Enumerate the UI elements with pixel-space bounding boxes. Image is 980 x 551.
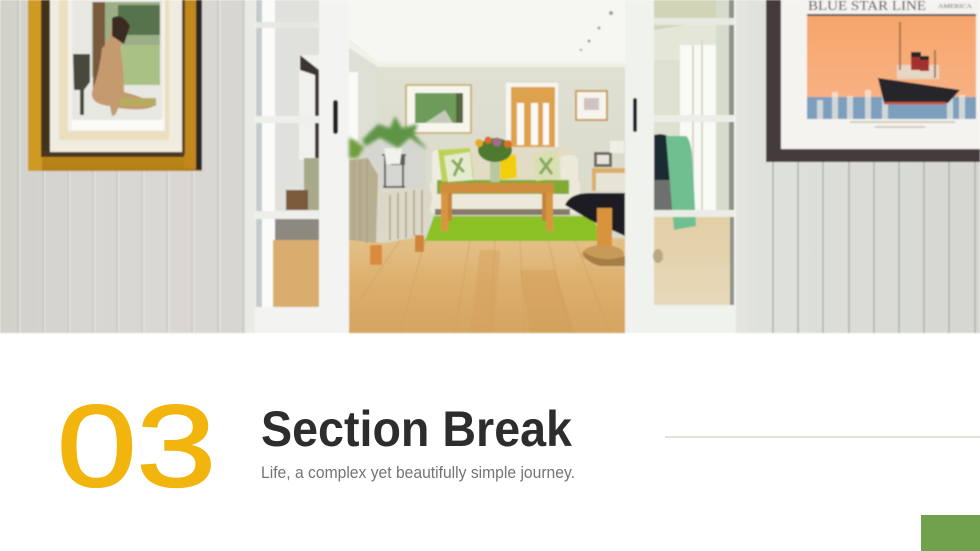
flowers in a vase <box>475 136 512 182</box>
green shag rug <box>425 216 604 241</box>
sideboard, photo and lamp <box>592 141 626 191</box>
black swivel chair on wooden base <box>565 193 625 266</box>
right panelled wall <box>748 0 980 333</box>
left panelled wall <box>0 0 250 333</box>
wooden coffee table <box>440 183 554 231</box>
wall art: forest painting <box>405 84 472 134</box>
green corner block <box>921 515 980 551</box>
small framed picture <box>575 90 608 121</box>
section title: Section Break <box>261 401 572 457</box>
wooden door at back of room <box>506 83 558 147</box>
framed Blue Star Line poster <box>766 0 980 162</box>
divider line <box>665 436 980 438</box>
striped armchair <box>349 158 432 265</box>
section number: 03 <box>57 381 216 511</box>
hero photo: living room seen through open doors <box>0 0 980 333</box>
potted plant and side table <box>349 116 428 188</box>
section subtitle: Life, a complex yet beautifully simple journey. <box>261 463 575 482</box>
right open door with glass panes <box>625 0 749 333</box>
left open door with glass panes <box>245 0 349 333</box>
living room: walls, ceiling and floor <box>349 0 626 333</box>
sofa with cushions <box>430 147 580 215</box>
framed painting: seated figure <box>28 0 202 171</box>
poster subtitle: AMERICA <box>938 4 973 10</box>
